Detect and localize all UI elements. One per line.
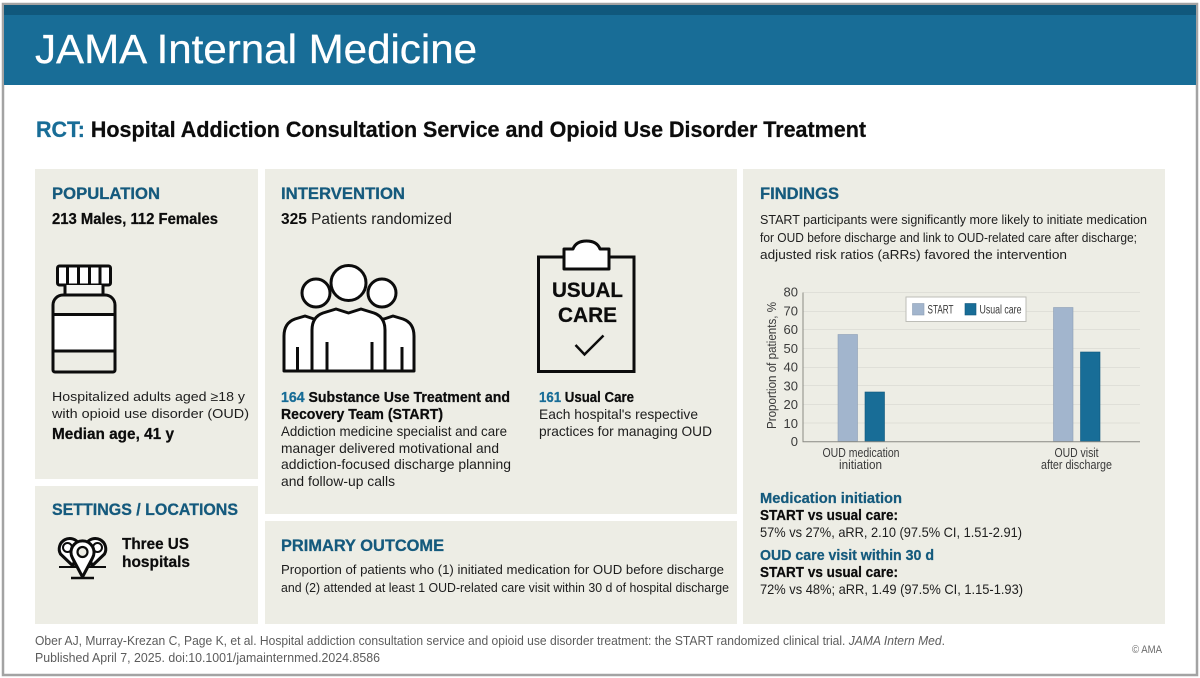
bar chart bbox=[764, 284, 1140, 472]
patients randomized: 325 Patients randomized bbox=[281, 211, 452, 228]
panel: intervention bbox=[265, 169, 737, 514]
y axis labels: 70 bbox=[784, 304, 798, 318]
population description: Hospitalized adults aged ≥18 y bbox=[52, 389, 246, 404]
usual care arm text: 161 Usual Care bbox=[539, 390, 634, 406]
x axis labels bbox=[822, 445, 1112, 472]
location text bbox=[122, 536, 190, 571]
citation bbox=[35, 633, 945, 665]
y axis labels: 80 bbox=[784, 284, 798, 300]
legend: Usual care bbox=[980, 304, 1022, 316]
header banner: JAMA Internal Medicine bbox=[35, 26, 477, 72]
heading: settings: SETTINGS / LOCATIONS bbox=[52, 500, 238, 519]
usual care arm text: Each hospital's respective bbox=[539, 406, 698, 422]
icon: group of people bbox=[284, 266, 414, 371]
medication initiation result bbox=[760, 490, 1022, 540]
legend bbox=[906, 297, 1026, 322]
x axis labels: OUD visit bbox=[1054, 445, 1099, 460]
panel: findings bbox=[743, 169, 1165, 624]
y axis labels bbox=[784, 284, 798, 449]
x axis labels: after discharge bbox=[1041, 457, 1112, 472]
icon: map pins bbox=[59, 538, 106, 578]
START arm text: 164 Substance Use Treatment and bbox=[281, 390, 510, 406]
icon: usual care clipboard: USUAL bbox=[552, 279, 623, 302]
legend: START bbox=[928, 304, 954, 316]
y axis labels: 0 bbox=[791, 434, 798, 449]
findings summary bbox=[760, 212, 1147, 262]
population description bbox=[51, 389, 249, 421]
citation: Ober AJ, Murray-Krezan C, Page K, et al. Hospital addiction consultation service and opioid use disorder treatment: the START randomized clinical trial. JAMA Intern Med. bbox=[35, 633, 945, 648]
bar: START medication initiation bbox=[838, 334, 858, 442]
header banner bbox=[4, 5, 1196, 85]
heading: primary outcome: PRIMARY OUTCOME bbox=[281, 536, 444, 555]
y axis labels: 40 bbox=[784, 360, 798, 374]
population counts: 213 Males, 112 Females bbox=[52, 211, 218, 228]
y axis labels: 30 bbox=[784, 378, 798, 394]
x axis labels: OUD medication bbox=[822, 445, 900, 460]
bar: START visit bbox=[1054, 308, 1073, 442]
START arm text: Addiction medicine specialist and care bbox=[281, 423, 507, 439]
medication initiation result: START vs usual care: bbox=[760, 507, 898, 524]
y axis title: Proportion of patients, % bbox=[764, 302, 779, 429]
icon: usual care clipboard bbox=[538, 241, 634, 372]
icon: pill bottle bbox=[53, 266, 115, 372]
findings summary: for OUD before discharge and link to OUD-related care after discharge; bbox=[760, 230, 1137, 245]
OUD care visit result: 72% vs 48%; aRR, 1.49 (97.5% CI, 1.15-1.93) bbox=[760, 581, 1023, 597]
outcome description bbox=[281, 562, 729, 595]
panel: primary outcome bbox=[265, 521, 737, 624]
panel: settings / locations bbox=[35, 486, 258, 624]
panel: population bbox=[35, 169, 258, 479]
bar: usual care visit bbox=[1080, 352, 1100, 442]
bar: usual care medication initiation bbox=[865, 392, 884, 442]
START arm text: and follow-up calls bbox=[281, 473, 395, 489]
heading: findings: FINDINGS bbox=[760, 184, 839, 203]
y axis labels: 60 bbox=[784, 322, 798, 337]
heading: intervention: INTERVENTION bbox=[281, 184, 405, 203]
usual care arm text bbox=[539, 390, 712, 439]
median age: Median age, 41 y bbox=[52, 426, 174, 443]
OUD care visit result: OUD care visit within 30 d bbox=[760, 547, 934, 564]
x axis labels: initiation bbox=[839, 457, 882, 472]
findings summary: adjusted risk ratios (aRRs) favored the intervention bbox=[760, 247, 1067, 262]
population description: with opioid use disorder (OUD) bbox=[51, 406, 249, 421]
START arm text: addiction-focused discharge planning bbox=[281, 456, 511, 472]
START arm text: Recovery Team (START) bbox=[281, 407, 443, 423]
copyright: © AMA bbox=[1132, 644, 1163, 656]
START arm text: manager delivered motivational and bbox=[281, 440, 499, 456]
y axis labels: 10 bbox=[784, 416, 798, 431]
medication initiation result: 57% vs 27%, aRR, 2.10 (97.5% CI, 1.51-2.91) bbox=[760, 524, 1022, 540]
location text: hospitals bbox=[122, 554, 190, 571]
OUD care visit result bbox=[760, 547, 1023, 597]
outcome description: Proportion of patients who (1) initiated medication for OUD before discharge bbox=[281, 562, 724, 577]
location text: Three US bbox=[122, 536, 189, 553]
START arm text bbox=[281, 390, 511, 489]
y axis labels: 50 bbox=[784, 341, 798, 356]
heading: population: POPULATION bbox=[52, 184, 160, 203]
citation: Published April 7, 2025. doi:10.1001/jamainternmed.2024.8586 bbox=[35, 650, 380, 665]
outcome description: and (2) attended at least 1 OUD-related care visit within 30 d of hospital discharge bbox=[281, 580, 729, 595]
OUD care visit result: START vs usual care: bbox=[760, 564, 898, 581]
icon: usual care clipboard: CARE bbox=[558, 304, 617, 327]
y axis labels: 20 bbox=[784, 397, 798, 412]
title: RCT: Hospital Addiction Consultation Service and Opioid Use Disorder Treatment bbox=[36, 117, 867, 142]
findings summary: START participants were significantly more likely to initiate medication bbox=[760, 212, 1147, 227]
usual care arm text: practices for managing OUD bbox=[539, 423, 712, 439]
medication initiation result: Medication initiation bbox=[760, 490, 902, 507]
